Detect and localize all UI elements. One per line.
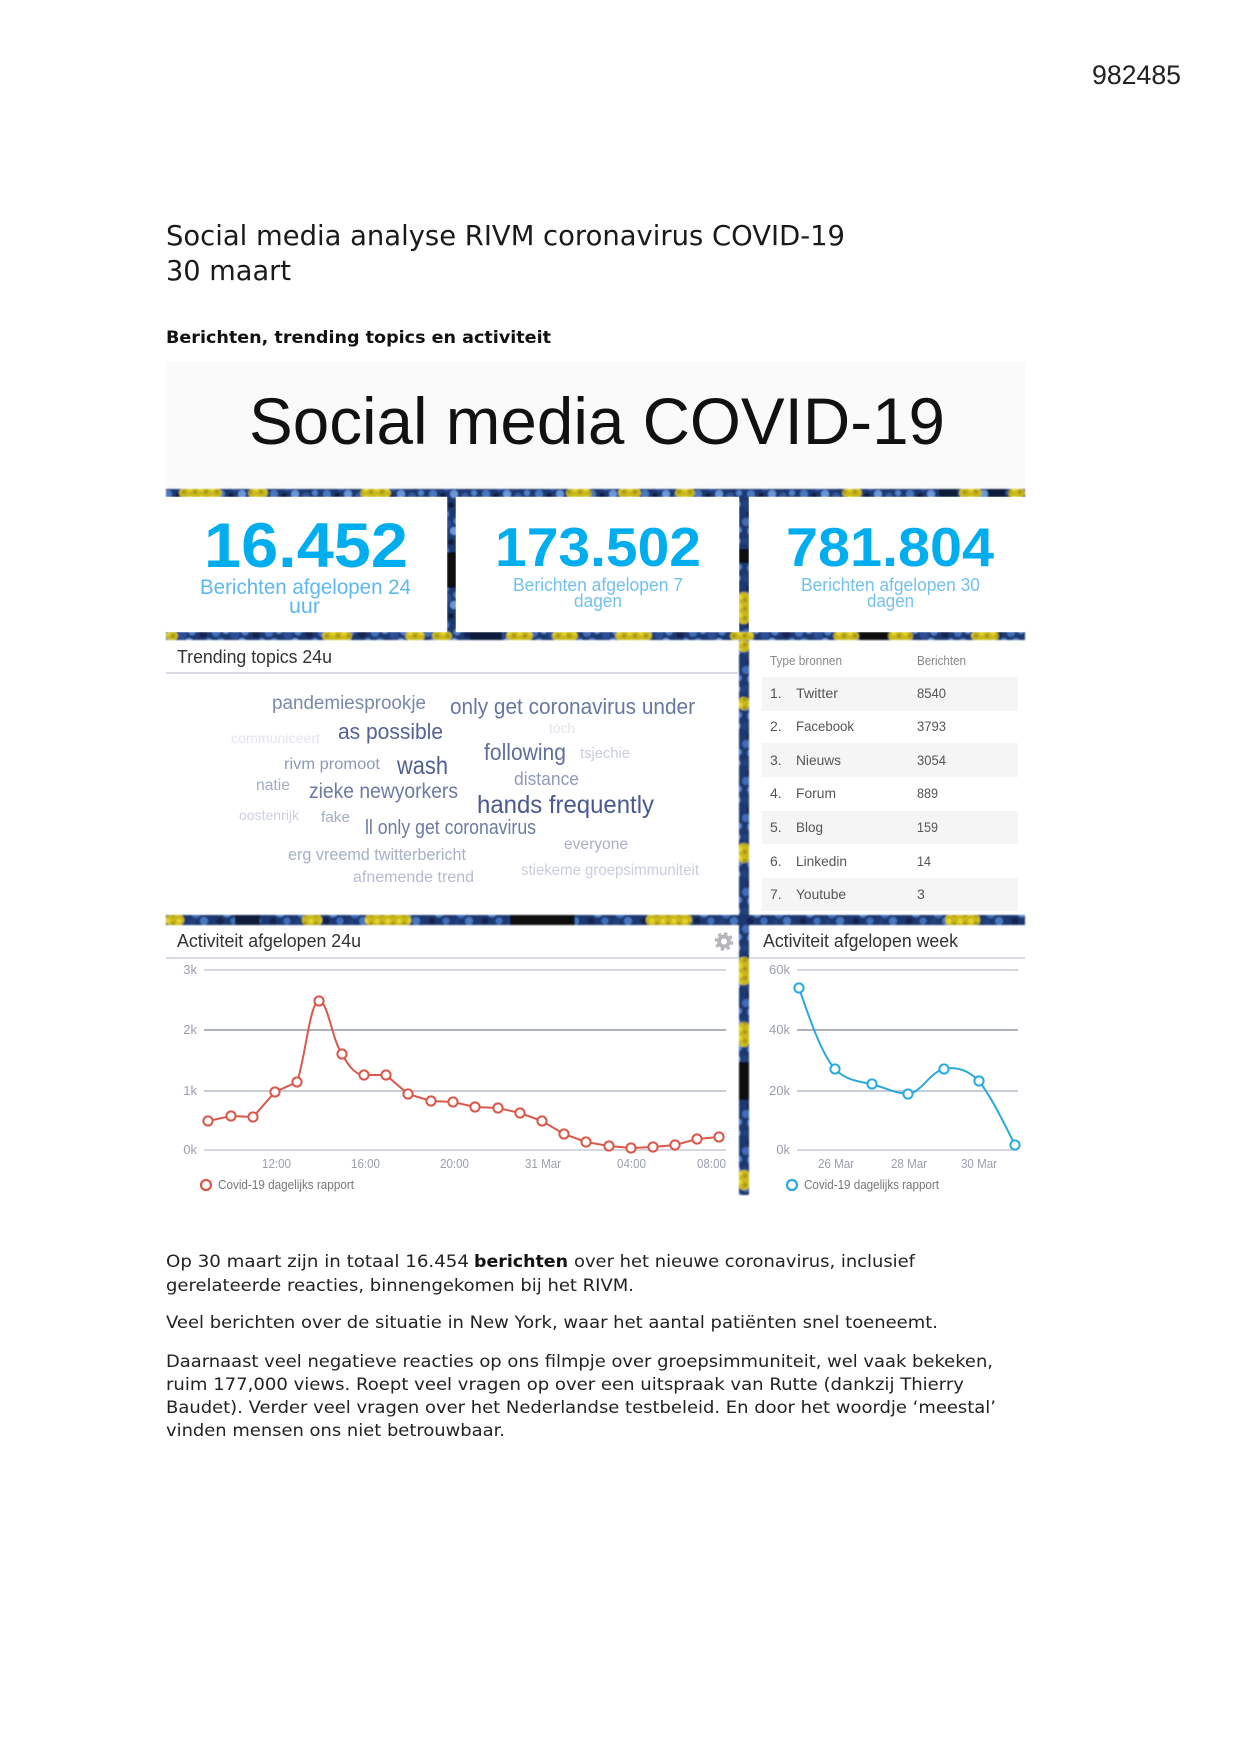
- word cloud: [231, 693, 700, 886]
- row: Nieuws: [762, 743, 1018, 777]
- row: Twitter: Twitter: [796, 685, 838, 701]
- paragraph: reactions: Daarnaast veel negatieve reacties op ons filmpje over groepsimmuniteit, wel vaak bekeken,: [166, 1352, 993, 1371]
- section heading: Berichten, trending topics en activiteit: [166, 328, 551, 348]
- stat card: 24 hours: uur: [289, 595, 320, 618]
- word cloud: following: [484, 739, 566, 765]
- word cloud: distance: [514, 769, 579, 789]
- row: Linkedin: [770, 853, 931, 869]
- paragraph: reactions: [166, 1352, 996, 1440]
- table header: [770, 653, 966, 668]
- paragraph: reactions: ruim 177,000 views. Roept veel vragen op over een uitspraak van Rutte (dankzij Thierry: [166, 1375, 964, 1394]
- page title: 30 maart: [166, 255, 291, 287]
- line chart: 24 hours: 3k: [183, 962, 197, 977]
- word cloud: everyone: [564, 836, 628, 853]
- stat card: 30 days: Berichten afgelopen 30: [801, 574, 980, 595]
- word cloud: rivm promoot: [284, 756, 381, 773]
- stat card: 7 days: Berichten afgelopen 7: [513, 574, 683, 595]
- row: Youtube: 7.: [770, 886, 782, 902]
- line chart: 24 hours: 31 Mar: [525, 1156, 562, 1171]
- word cloud: pandemiesprookje: [272, 693, 426, 714]
- word cloud: ll only get coronavirus: [365, 817, 536, 839]
- stat card: 24 hours: Berichten afgelopen 24: [200, 576, 411, 599]
- panel: trending topics: [166, 647, 739, 886]
- row: Youtube: [762, 878, 1018, 911]
- paragraph: New York: Veel berichten over de situatie in New York, waar het aantal patiënten snel toeneemt.: [166, 1313, 938, 1332]
- word cloud: erg vreemd twitterbericht: [288, 845, 466, 864]
- line chart: 24 hours: 12:00: [262, 1156, 291, 1171]
- chart legend: week: Covid-19 dagelijks rapport: [804, 1177, 939, 1192]
- line chart: 24 hours: [183, 962, 726, 1171]
- row: Linkedin: 14: [917, 853, 931, 869]
- line chart: 24 hours: 20:00: [440, 1156, 469, 1171]
- word cloud: fake: [321, 809, 350, 826]
- panel: source types table: [762, 653, 1018, 911]
- icon: settings gear: [716, 934, 732, 949]
- dashboard header banner: [166, 361, 1025, 489]
- word cloud: stiekeme groepsimmuniteit: [521, 862, 700, 879]
- chart heading: Activiteit afgelopen 24u: [177, 931, 361, 951]
- panel: activity last week: [749, 931, 1025, 1192]
- stat card: 24 hours: 16.452: [204, 511, 408, 581]
- page title: [166, 220, 845, 287]
- row: Facebook: 2.: [770, 718, 782, 734]
- word cloud: natie: [256, 777, 290, 794]
- body text: [166, 1252, 996, 1440]
- stat card: 7 days: 173.502: [495, 516, 701, 578]
- word cloud: afnemende trend: [353, 869, 474, 886]
- word cloud: wash: [396, 752, 448, 780]
- row: Twitter: 1.: [770, 685, 782, 701]
- row: Forum: Forum: [796, 785, 836, 801]
- word cloud: tsjechie: [580, 745, 630, 762]
- word cloud: as possible: [338, 719, 443, 744]
- paragraph: totals: berichten: [474, 1252, 568, 1271]
- line chart: 24 hours: 0k: [183, 1142, 197, 1157]
- row: Nieuws: 3054: [917, 752, 946, 768]
- paragraph: reactions: vinden mensen ons niet betrouwbaar.: [166, 1421, 505, 1440]
- line chart: 24 hours: 1k: [183, 1083, 197, 1098]
- row: Youtube: 3: [917, 886, 925, 902]
- line chart: 24 hours: 08:00: [697, 1156, 726, 1171]
- line chart: week: 0k: [776, 1142, 790, 1157]
- row: Youtube: Youtube: [796, 886, 846, 902]
- table header: Type bronnen: [770, 653, 842, 668]
- row: Nieuws: 3.: [770, 752, 782, 768]
- line chart: week: 28 Mar: [891, 1156, 928, 1171]
- row: Facebook: 3793: [917, 718, 946, 734]
- line chart: 24 hours: 04:00: [617, 1156, 646, 1171]
- word cloud: communiceert: [231, 730, 320, 746]
- row: Twitter: 8540: [917, 685, 946, 701]
- line chart: week: 40k: [769, 1022, 790, 1037]
- row: Blog: Blog: [796, 819, 823, 835]
- table header: Berichten: [917, 653, 966, 668]
- page title: Social media analyse RIVM coronavirus COVID-19: [166, 220, 845, 252]
- trending topics heading: Trending topics 24u: [177, 647, 332, 667]
- paragraph: totals: over het nieuwe coronavirus, inclusief: [574, 1252, 916, 1271]
- line chart: week: 20k: [769, 1083, 790, 1098]
- word cloud: oostenrijk: [239, 807, 300, 823]
- line chart: 24 hours: 16:00: [351, 1156, 380, 1171]
- dashboard: [166, 361, 1025, 1195]
- row: Facebook: [770, 718, 946, 734]
- stat card: 24 hours: [166, 497, 447, 632]
- document number: 982485: [1092, 60, 1181, 90]
- row: Blog: 5.: [770, 819, 782, 835]
- word cloud: zieke newyorkers: [309, 780, 458, 803]
- paragraph: totals: [166, 1252, 916, 1295]
- chart heading: Activiteit afgelopen week: [763, 931, 959, 951]
- chart legend: 24 hours: Covid-19 dagelijks rapport: [218, 1177, 354, 1192]
- row: Blog: [762, 811, 1018, 844]
- stat card: 7 days: [456, 497, 739, 632]
- row: Linkedin: 6.: [770, 853, 782, 869]
- paragraph: totals: gerelateerde reacties, binnengekomen bij het RIVM.: [166, 1276, 634, 1295]
- panel: activity last 24 hours: [166, 931, 739, 1192]
- line chart: week: 60k: [769, 962, 790, 977]
- stat card: 30 days: 781.804: [786, 516, 994, 578]
- line chart: week: 26 Mar: [818, 1156, 855, 1171]
- paragraph: reactions: Baudet). Verder veel vragen over het Nederlandse testbeleid. En door het woordje ‘meestal’: [166, 1398, 996, 1417]
- dashboard header banner: Social media COVID-19: [249, 384, 945, 458]
- row: Nieuws: Nieuws: [796, 752, 841, 768]
- paragraph: totals: Op 30 maart zijn in totaal 16.454: [166, 1252, 469, 1271]
- row: Linkedin: Linkedin: [796, 853, 847, 869]
- row: Twitter: [762, 677, 1018, 711]
- line chart: week: [769, 962, 1020, 1171]
- stat card: 30 days: [749, 497, 1025, 632]
- row: Facebook: Facebook: [796, 718, 855, 734]
- row: Forum: 4.: [770, 785, 782, 801]
- stat card: 7 days: dagen: [574, 590, 622, 611]
- line chart: week: 30 Mar: [961, 1156, 998, 1171]
- row: Forum: 889: [917, 785, 938, 801]
- virus texture frame: [166, 489, 1025, 1195]
- row: Blog: 159: [917, 819, 938, 835]
- word cloud: hands frequently: [477, 791, 654, 819]
- word cloud: only get coronavirus under: [450, 694, 695, 719]
- line chart: 24 hours: 2k: [183, 1022, 197, 1037]
- row: Forum: [770, 785, 938, 801]
- stat card: 30 days: dagen: [867, 590, 914, 611]
- word cloud: tóch: [549, 720, 575, 736]
